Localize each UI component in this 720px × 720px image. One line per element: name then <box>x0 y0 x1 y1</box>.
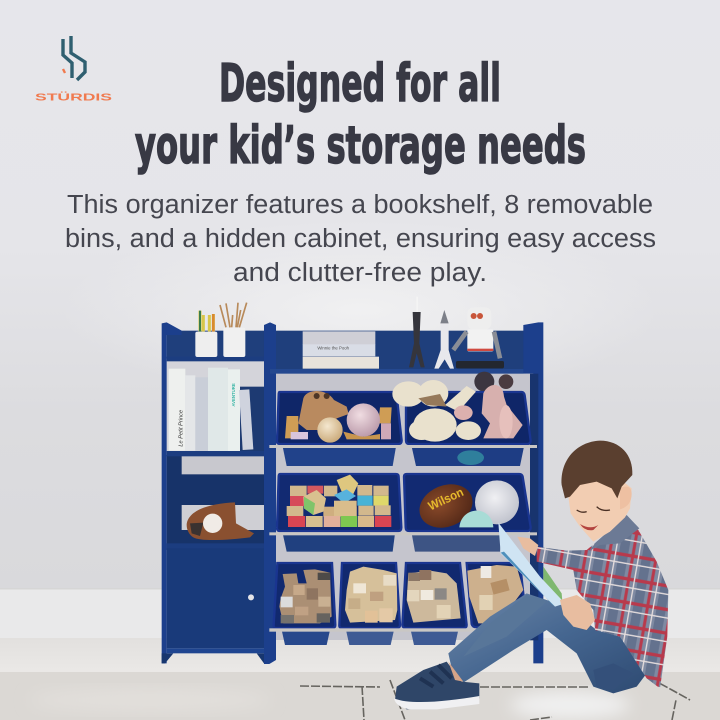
plaid shirt <box>537 515 668 688</box>
description text <box>65 191 656 287</box>
title: Designed for all <box>219 54 501 114</box>
shelf frame <box>162 322 543 664</box>
logo wordmark: STÜRDIS <box>35 90 112 104</box>
books on left shelf <box>169 368 253 451</box>
books on left shelf: AVENTURE <box>231 383 236 407</box>
icon: logo mark <box>63 36 85 80</box>
cabinet door <box>167 548 264 653</box>
logo <box>35 36 112 104</box>
football <box>413 477 479 535</box>
hands <box>517 537 595 630</box>
books on left shelf: Le Petit Prince <box>179 410 185 447</box>
alphabet blocks <box>287 475 391 527</box>
wooden toys in bin <box>285 391 392 443</box>
football: Wilson <box>426 485 466 513</box>
bins: upper rows <box>277 392 531 531</box>
jeans <box>448 593 647 693</box>
wooden letter blocks in small bins <box>279 565 523 623</box>
description text: This organizer features a bookshelf, 8 removable <box>67 191 653 219</box>
rug <box>0 672 720 720</box>
books on top shelf <box>303 331 379 369</box>
description text: bins, and a hidden cabinet, ensuring easy access <box>65 225 656 253</box>
top row bin backs <box>282 447 524 645</box>
sneaker <box>394 662 479 709</box>
books on top shelf: Winnie the Pooh <box>317 346 350 351</box>
plush bear and bunny <box>392 380 523 442</box>
description text: and clutter-free play. <box>233 259 487 287</box>
title <box>135 54 586 176</box>
storage organizer shelf <box>162 297 543 664</box>
book <box>498 523 565 607</box>
boy reading a book <box>394 441 668 709</box>
metal rails <box>269 445 537 632</box>
pen cups <box>195 303 247 357</box>
white and mint balls <box>459 480 519 527</box>
baseball glove <box>187 502 254 540</box>
rockets and robot toys <box>409 297 513 392</box>
bins: lower row <box>274 563 527 628</box>
head and face <box>562 441 632 542</box>
